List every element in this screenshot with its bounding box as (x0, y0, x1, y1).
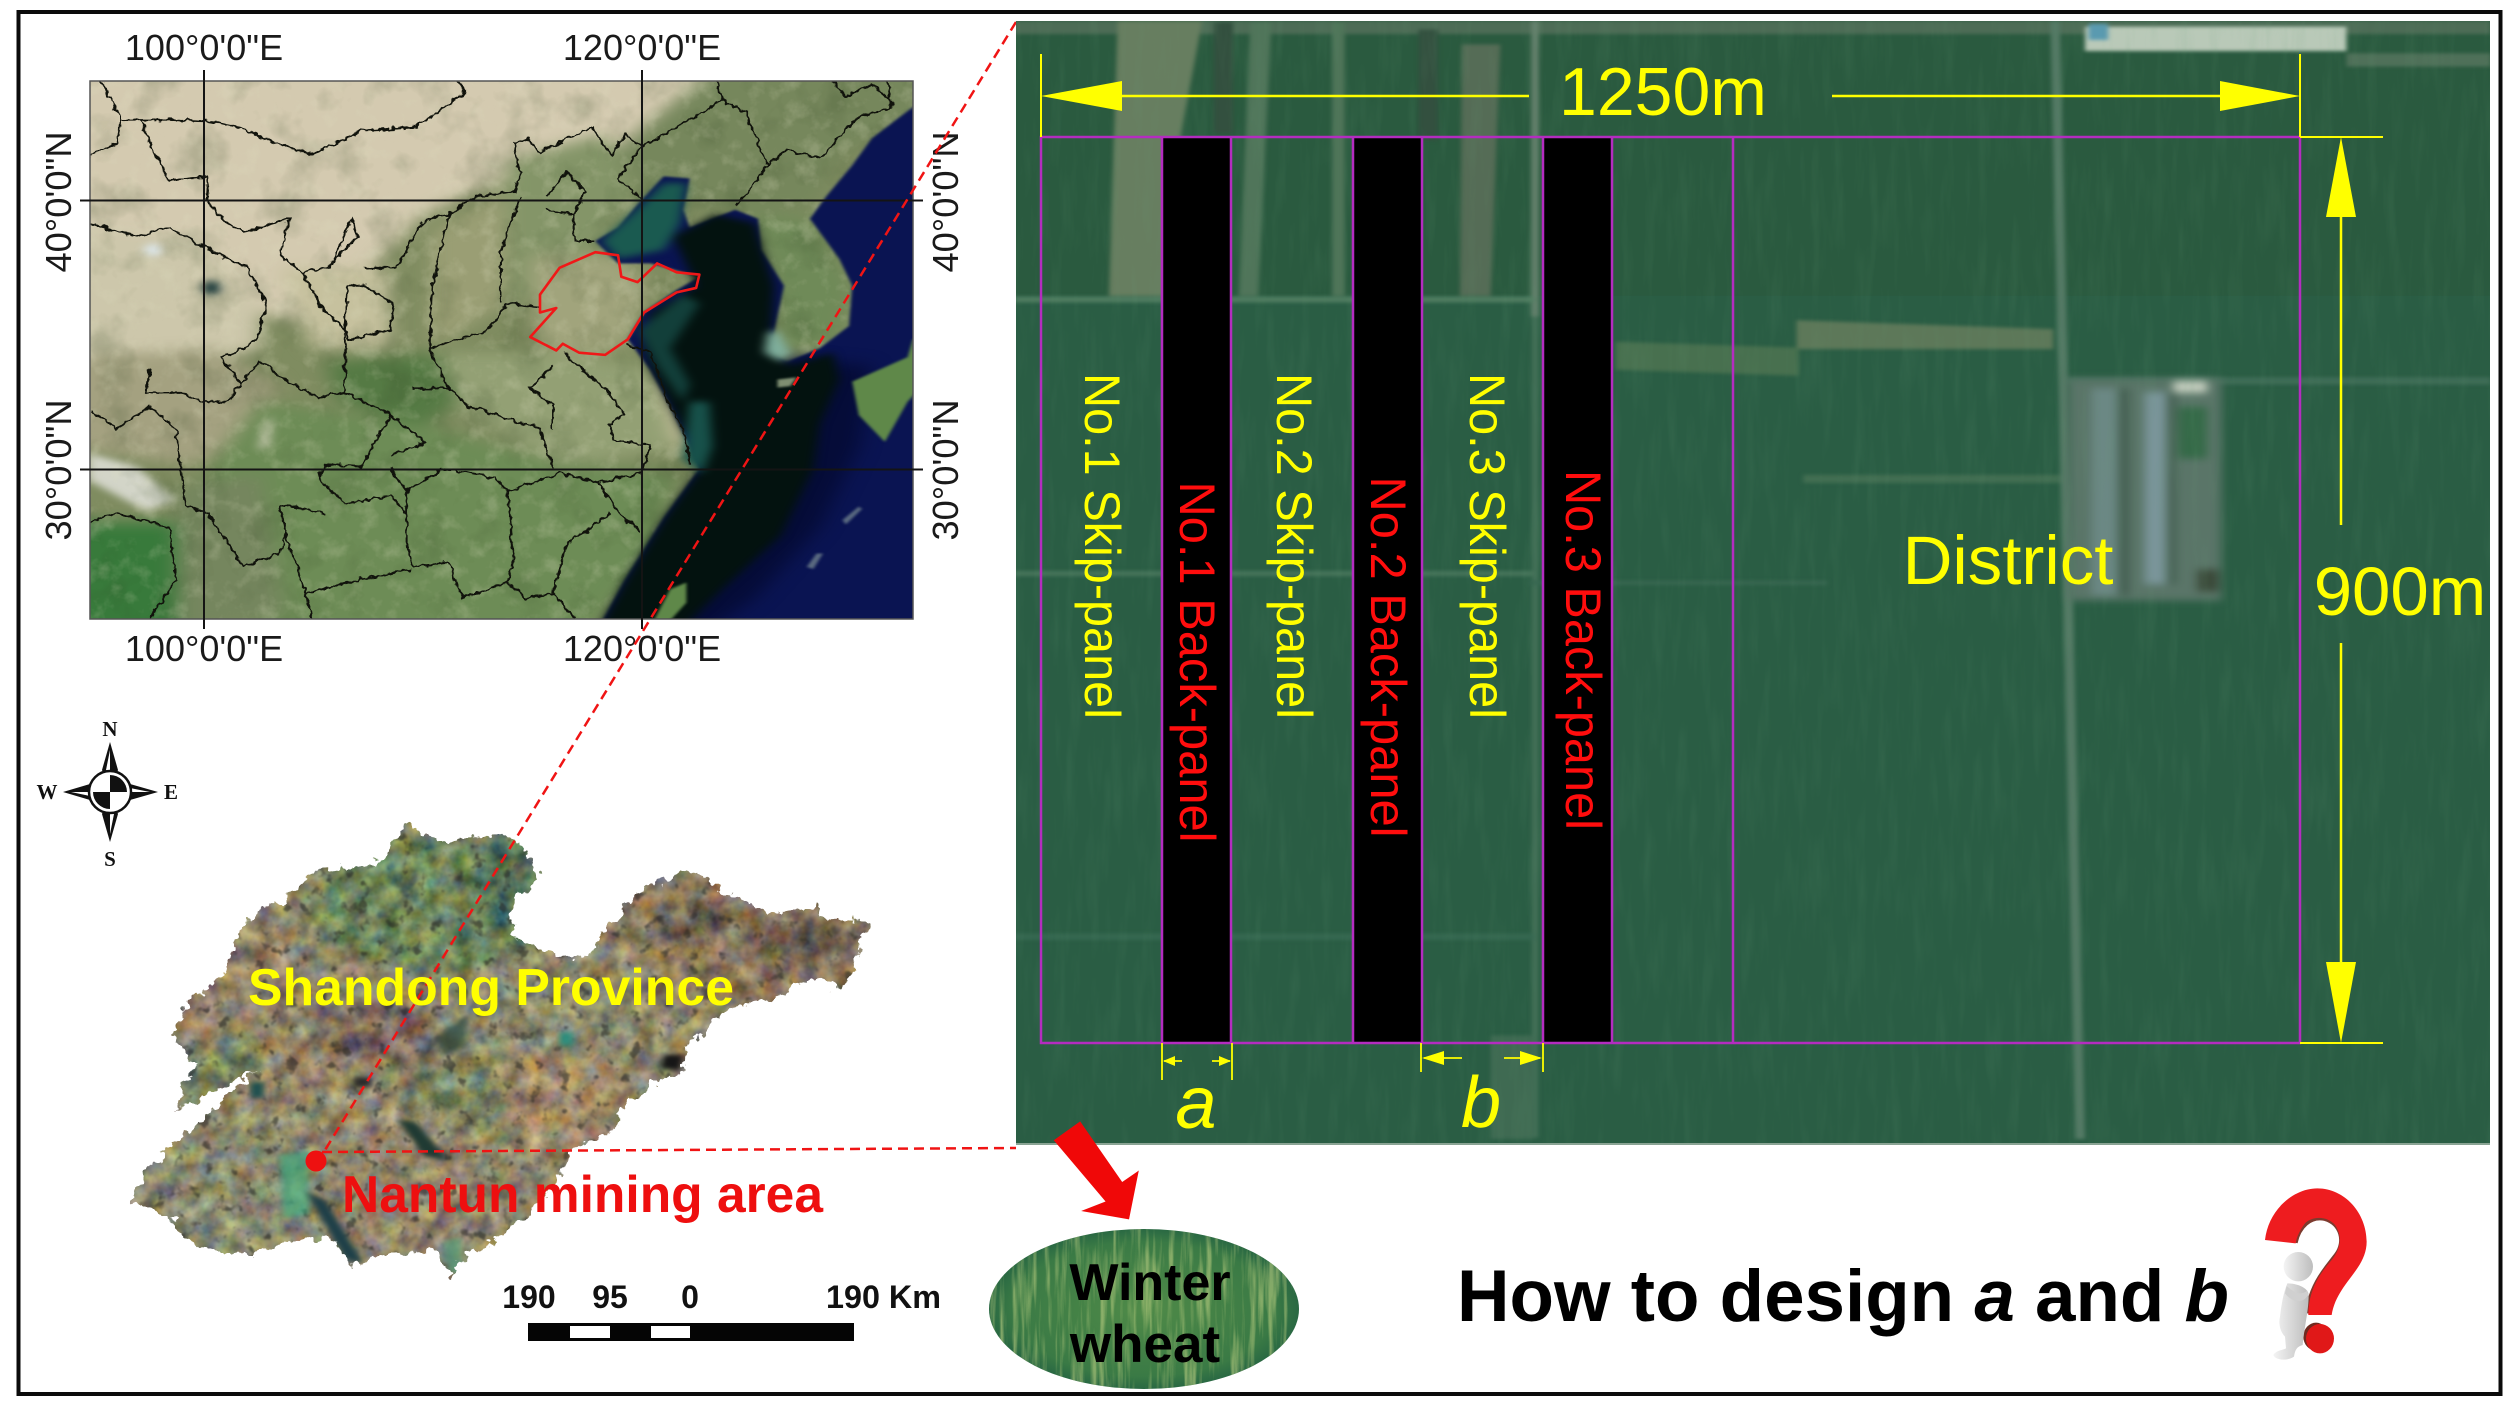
map coordinate labels: 120°0'0"E (563, 27, 721, 68)
icon: compass rose (36, 717, 178, 871)
location marker: Nantun (306, 1150, 326, 1172)
icon: winter wheat ellipse: Winter (1069, 1254, 1231, 1312)
panel: Shandong Province satellite image (130, 822, 871, 1280)
labels: back-panels: No.2 Back-panel (1360, 476, 1416, 838)
icon: compass rose: W (36, 780, 58, 804)
village block (2068, 379, 2221, 601)
labels: back-panels: No.3 Back-panel (1555, 470, 1611, 830)
labels: skip-panels: No.3 Skip-panel (1459, 373, 1515, 719)
map coordinate labels: 100°0'0"E (125, 628, 283, 669)
map coordinate labels: 30°0'0"N (38, 400, 79, 540)
dimension: 900m height (2300, 137, 2486, 1043)
map coordinate labels: 40°0'0"N (38, 132, 79, 272)
scale bar (502, 1279, 941, 1341)
panel layout: district boundary and black back-panels (1041, 137, 2300, 1043)
labels: skip-panels: No.2 Skip-panel (1266, 373, 1322, 719)
labels: back-panels (1169, 470, 1611, 842)
scale bar: 95 (592, 1279, 628, 1315)
dimension: b (1421, 1043, 1543, 1143)
heading: How to design a and b: How to design a and b (1457, 1256, 2229, 1337)
map coordinate labels: 30°0'0"N (925, 400, 966, 540)
label: Nantun mining area: Nantun mining area (342, 1166, 824, 1224)
dimension: 900m height: 900m (2314, 553, 2486, 630)
dashed zoom leader lines (322, 22, 1016, 1155)
labels: skip-panels (1074, 373, 1515, 719)
map coordinate labels (38, 27, 966, 669)
dimension: a: a (1175, 1061, 1217, 1144)
icon: winter wheat ellipse: wheat (1069, 1315, 1220, 1374)
dimension: 1250m width: 1250m (1559, 54, 1767, 130)
scale bar: 190 Km (826, 1279, 941, 1315)
dimension: b: b (1461, 1063, 1501, 1143)
Shandong outline on regional map (530, 252, 699, 355)
label: Shandong Province: Shandong Province (248, 959, 734, 1017)
dimension: 1250m width (1041, 54, 2300, 137)
icon: compass rose: N (102, 717, 118, 741)
icon: compass rose: S (104, 847, 116, 871)
icon: thinking figure with question mark (2265, 1188, 2367, 1360)
arrow: red pointer to winter wheat (1054, 1121, 1139, 1219)
map coordinate labels: 100°0'0"E (125, 27, 283, 68)
graticule lines (80, 70, 923, 629)
icon: compass rose: E (164, 780, 178, 804)
dimension: a (1162, 1043, 1232, 1144)
map coordinate labels: 40°0'0"N (925, 132, 966, 272)
scale bar: 190 (502, 1279, 556, 1315)
map coordinate labels: 120°0'0"E (563, 628, 721, 669)
provincial boundaries (90, 81, 891, 619)
labels: skip-panels: No.1 Skip-panel (1074, 373, 1130, 719)
scale bar: 0 (681, 1279, 699, 1315)
panel: mining district satellite image (1010, 0, 2510, 1145)
panel: regional satellite map of eastern China (65, 67, 937, 634)
icon: winter wheat ellipse (985, 1225, 1305, 1395)
label: District: District (1903, 522, 2113, 599)
labels: back-panels: No.1 Back-panel (1169, 482, 1225, 842)
